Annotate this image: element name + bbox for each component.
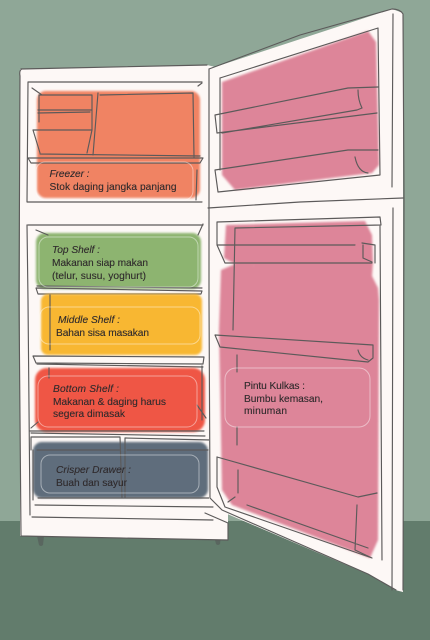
door lower pink — [219, 221, 379, 558]
middle shelf label — [40, 307, 200, 344]
top shelf label: (telur, susu, yoghurt) — [52, 271, 146, 282]
freezer label — [36, 162, 193, 200]
middle shelf label: Middle Shelf : — [58, 315, 120, 326]
fridge feet — [37, 536, 221, 546]
bottom shelf label: segera dimasak — [53, 409, 126, 420]
door shelves — [215, 28, 380, 192]
middle shelf label: Bahan sisa masakan — [56, 328, 149, 339]
fridge door — [208, 9, 404, 592]
top shelf label — [39, 237, 198, 287]
top shelf — [36, 224, 203, 294]
door label — [225, 368, 370, 427]
door label: Bumbu kemasan, — [244, 394, 323, 405]
bottom shelf label — [38, 376, 197, 427]
floor — [0, 521, 430, 640]
top shelf label: Top Shelf : — [52, 245, 100, 256]
fridge body — [19, 65, 228, 540]
bottom shelf label: Makanan & daging harus — [53, 397, 166, 408]
crisper label: Buah dan sayur — [56, 478, 128, 489]
freezer compartment — [28, 83, 203, 200]
bottom shelf label: Bottom Shelf : — [53, 384, 119, 395]
freezer colour block — [37, 91, 200, 198]
door inner pink — [222, 31, 379, 190]
bottom shelf — [30, 366, 206, 436]
freezer label: Freezer : — [50, 169, 90, 180]
top shelf label: Makanan siap makan — [52, 258, 148, 269]
door label: Pintu Kulkas : — [244, 381, 305, 392]
freezer label: Stok daging jangka panjang — [50, 182, 177, 193]
freezer shelves and boxes — [28, 83, 203, 200]
crisper label: Crisper Drawer : — [56, 465, 131, 476]
crisper label — [41, 455, 199, 493]
crisper drawer — [31, 437, 213, 507]
middle shelf — [33, 294, 204, 367]
door label: minuman — [244, 406, 287, 417]
